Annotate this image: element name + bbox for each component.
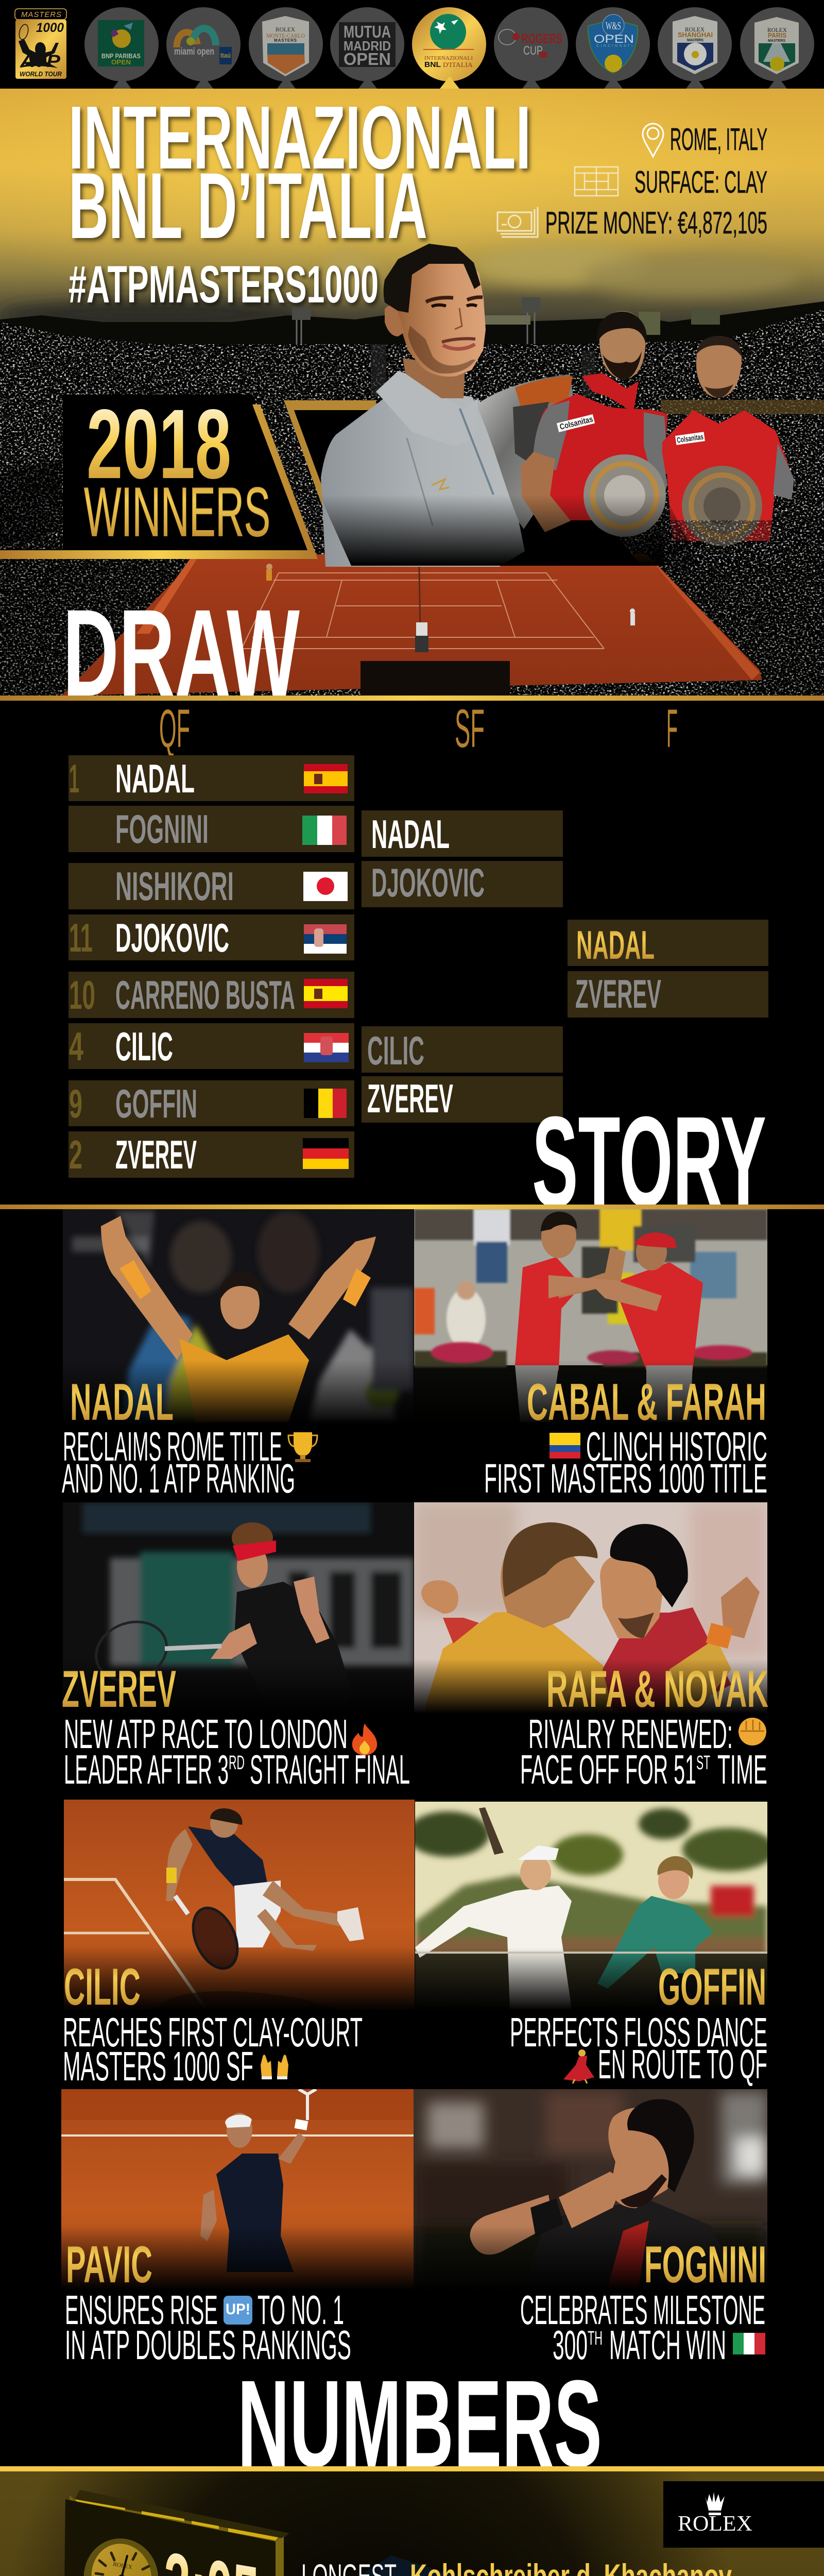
caption line two: TIME xyxy=(717,1747,767,1792)
title xyxy=(68,87,531,314)
trophy xyxy=(472,375,575,529)
icon: fist xyxy=(739,1718,766,1745)
round headers: SF xyxy=(455,699,485,759)
logo: Rolex Paris Masters xyxy=(740,7,814,89)
logo: Miami Open xyxy=(166,7,241,89)
neck xyxy=(403,358,465,398)
QF row: Zverev: 2 xyxy=(69,1132,82,1177)
logo: Mutua Madrid Open: OPEN xyxy=(344,49,391,69)
F row: Nadal xyxy=(568,920,768,968)
clock: longest match xyxy=(64,2490,289,2576)
logo: Rolex Shanghai Masters xyxy=(658,7,732,89)
facial features xyxy=(426,297,483,349)
divider bar under hero xyxy=(0,696,824,701)
hero: doubles trophies xyxy=(583,454,762,546)
panel: Cilic story: REACHES FIRST CLAY-COURT xyxy=(63,2009,363,2055)
logo: BNP Paribas Open xyxy=(84,7,159,89)
photo: Rafa and Novak at net xyxy=(414,1502,767,1716)
divider bar above story xyxy=(0,1205,824,1209)
caption line two: LEADER AFTER 3 xyxy=(64,1747,229,1792)
photo fade xyxy=(414,1360,767,1426)
logo: Rolex Monte-Carlo Masters: MASTERS xyxy=(274,38,297,43)
panel: Rafa and Novak story xyxy=(414,1502,768,1792)
logo: ATP Masters 1000: ATP xyxy=(20,52,60,71)
hero: treeline and buildings xyxy=(0,297,824,371)
semifinals column xyxy=(362,810,563,1123)
QF row: Goffin: GOFFIN xyxy=(115,1081,197,1126)
QF row: Cilic xyxy=(68,1023,354,1069)
jacket xyxy=(321,371,525,567)
icon: Colombia flag xyxy=(550,1433,580,1459)
player name: PAVIC xyxy=(66,2236,152,2294)
icon: banknotes xyxy=(497,207,538,237)
player name: ZVEREV xyxy=(62,1660,176,1718)
hair xyxy=(384,244,480,313)
caption line two: TH xyxy=(588,2328,603,2349)
photo: Nadal celebrating xyxy=(63,1209,414,1426)
logo: Rogers Cup: ROGERS xyxy=(521,31,562,46)
QF row: Nadal: NADAL xyxy=(115,756,195,801)
photo: Pavic serving xyxy=(61,2089,414,2290)
QF row: Djokovic: DJOKOVIC xyxy=(115,915,229,960)
logo: Rolex Monte-Carlo Masters: MONTE-CARLO xyxy=(266,32,305,39)
hero: Cabal: Colsanitas xyxy=(559,415,594,432)
year: 2018 xyxy=(87,388,231,499)
hero: black backdrop frame behind winners xyxy=(284,400,641,566)
F row: Zverev: ZVEREV xyxy=(575,971,661,1016)
photo fade xyxy=(61,2226,414,2290)
logo: Rolex Monte-Carlo Masters: ROLEX xyxy=(276,26,295,33)
winners word: WINNERS xyxy=(84,473,270,551)
hero: clay court xyxy=(62,554,762,696)
QF row: Nadal xyxy=(68,755,354,801)
caption: NEW ATP RACE TO LONDON xyxy=(64,1711,348,1757)
logo: Rolex Shanghai Masters: ROLEX xyxy=(685,26,705,33)
icon: location pin xyxy=(643,124,663,157)
icon: fire xyxy=(352,1723,377,1755)
logo: Rolex Paris Masters: MASTERS xyxy=(768,39,785,43)
SF row: Nadal: NADAL xyxy=(371,811,450,857)
logo: Miami Open: Itaú xyxy=(220,52,231,59)
logo: ATP Masters 1000: MASTERS xyxy=(21,10,61,19)
SF row: Djokovic: DJOKOVIC xyxy=(371,860,485,905)
caption line two: 300 xyxy=(553,2322,588,2368)
icon: court xyxy=(575,167,618,196)
hero: Nadal with trophy xyxy=(321,244,575,567)
icon: up badge xyxy=(224,2296,252,2325)
SF row: Zverev: ZVEREV xyxy=(367,1076,453,1121)
sponsor: Rolex: ROLEX xyxy=(678,2512,752,2536)
QF row: Zverev: ZVEREV xyxy=(115,1132,197,1177)
logo: Internazionali BNL d'Italia (active): BNL xyxy=(424,60,441,69)
icon: raised hands xyxy=(261,2055,288,2079)
logo: Internazionali BNL d'Italia (active): INTERNAZIONALI xyxy=(424,55,473,61)
logo: Rolex Monte-Carlo Masters xyxy=(249,7,323,89)
sponsor: Rolex xyxy=(663,2481,824,2548)
hero: 2018 winners panel xyxy=(0,388,318,559)
photo fade xyxy=(414,1659,767,1714)
QF row: Cilic: CILIC xyxy=(115,1024,173,1069)
QF row: Nadal: 1 xyxy=(69,756,79,801)
infographic canvas: STRAIGHT FINAL xyxy=(250,1747,410,1792)
logo: ATP Masters 1000: 1000 xyxy=(36,21,64,35)
SF row: Cilic xyxy=(362,1026,563,1073)
section heading: draw: DRAW xyxy=(63,584,300,722)
logo: Rolex Shanghai Masters: MASTERS xyxy=(687,39,703,42)
caption line two xyxy=(553,2322,726,2368)
player name: CILIC xyxy=(64,1958,141,2016)
logo: Internazionali BNL d'Italia (active) xyxy=(412,7,486,89)
logo: Rogers Cup: CUP xyxy=(523,44,543,58)
photo: Cilic serving xyxy=(64,1800,415,2011)
logo: Rogers Cup xyxy=(494,7,568,89)
caption line two: RD xyxy=(229,1752,245,1774)
player name: NADAL xyxy=(70,1374,174,1431)
hero: stadium crowd xyxy=(0,309,824,701)
logo: Rolex Shanghai Masters: SHANGHAI xyxy=(678,31,713,39)
photo fade xyxy=(414,2226,767,2290)
SF row: Nadal xyxy=(362,810,563,857)
panel: Pavic story: TO NO. 1 xyxy=(258,2287,344,2333)
SF row: Cilic: CILIC xyxy=(367,1028,424,1073)
F row: Nadal: NADAL xyxy=(576,922,655,968)
QF row: Goffin: 9 xyxy=(69,1081,82,1126)
icon: trophy xyxy=(288,1432,317,1462)
QF row: Fognini: FOGNINI xyxy=(115,806,209,852)
QF row: Carreno Busta: CARRENO BUSTA xyxy=(115,972,295,1018)
logo: Mutua Madrid Open: MADRID xyxy=(344,38,391,54)
numbers section background xyxy=(0,2471,824,2576)
QF row: Carreno Busta xyxy=(68,972,354,1018)
panel: Nadal story: AND NO. 1 ATP RANKING xyxy=(62,1455,295,1501)
final column xyxy=(568,920,768,1018)
hero: Farah: Colsanitas xyxy=(676,432,704,445)
logo: Rolex Paris Masters: ROLEX xyxy=(767,26,787,33)
panel: Nadal story: RECLAIMS ROME TITLE xyxy=(63,1423,282,1469)
logo: Rolex Paris Masters: PARIS xyxy=(768,31,786,39)
logo: Internazionali BNL d'Italia (active): D'ITALIA xyxy=(443,61,473,69)
icon: up badge: UP! xyxy=(226,2301,250,2318)
hero: Cabal xyxy=(521,311,668,532)
icon: Rolex crown xyxy=(705,2492,725,2515)
draw section background xyxy=(0,701,824,1205)
QF row: Djokovic: 11 xyxy=(69,915,93,960)
photo fade xyxy=(63,1659,414,1714)
photo: Goffin floss dance xyxy=(407,1802,775,2010)
panel: Pavic story: ENSURES RISE xyxy=(65,2287,218,2333)
logo: BNP Paribas Open: OPEN xyxy=(111,58,131,66)
header bar background xyxy=(0,0,824,89)
photo: Cabal and Farah hugging xyxy=(414,1209,767,1427)
logo: W&S Open Cincinnati: CINCINNATI xyxy=(596,44,632,48)
panel: Zverev story xyxy=(62,1502,414,1792)
quarterfinals column xyxy=(68,755,354,1178)
panel: Fognini story xyxy=(414,2089,767,2368)
logo: Miami Open: miami open xyxy=(174,46,214,57)
logo: Mutua Madrid Open: MUTUA xyxy=(344,22,391,41)
QF row: Fognini xyxy=(68,806,354,852)
logo: W&S Open Cincinnati: W&S xyxy=(606,20,621,32)
title: BNL D’ITALIA xyxy=(68,153,427,258)
head xyxy=(398,262,486,377)
QF row: Nishikori: NISHIKORI xyxy=(115,863,234,909)
caption line two: ST xyxy=(696,1752,710,1774)
photo fade xyxy=(64,1947,415,2011)
logo: ATP Masters 1000: WORLD TOUR xyxy=(20,70,62,78)
panel: Cabal and Farah story xyxy=(414,1209,767,1501)
logo: Mutua Madrid Open xyxy=(330,7,404,89)
panel: Goffin story xyxy=(407,1802,775,2087)
logo: W&S Open Cincinnati: OPEN xyxy=(594,32,634,45)
QF row: Zverev xyxy=(68,1131,354,1178)
panel: Cilic story xyxy=(63,1800,415,2089)
title: INTERNAZIONALI xyxy=(68,87,531,188)
panel: Nadal story xyxy=(62,1209,414,1501)
QF row: Carreno Busta: 10 xyxy=(69,972,95,1018)
photo fade xyxy=(415,1947,767,2010)
logo: ATP Masters 1000 xyxy=(15,9,66,79)
hero: Farah xyxy=(654,336,794,541)
round headers: QF xyxy=(159,699,190,759)
photo: Fognini blowing kiss xyxy=(414,2089,767,2290)
logo: BNP Paribas Open: BNP PARIBAS xyxy=(101,52,141,60)
QF row: Cilic: 4 xyxy=(69,1024,83,1069)
tournament facts xyxy=(497,122,767,240)
hero: bottom fade over winners xyxy=(319,495,700,566)
panel: Cilic story: MASTERS 1000 SF xyxy=(63,2043,253,2089)
icon: dancer xyxy=(563,2049,594,2083)
divider bar above numbers xyxy=(0,2466,824,2471)
hero: sky background xyxy=(0,89,824,346)
QF row: Goffin xyxy=(68,1080,354,1126)
hashtag: #ATPMASTERS1000 xyxy=(68,255,379,314)
infographic canvas: F xyxy=(666,699,678,759)
ear xyxy=(385,306,404,336)
photo fade xyxy=(63,1360,414,1426)
stat: longest match xyxy=(301,2557,732,2576)
logo: W&S Open Cincinnati xyxy=(576,7,650,89)
round headers xyxy=(159,699,678,759)
icon: Italy flag xyxy=(733,2333,765,2354)
photo: Zverev forehand xyxy=(63,1502,414,1690)
panel: Pavic story: IN ATP DOUBLES RANKINGS xyxy=(65,2322,351,2368)
panel: Pavic story xyxy=(61,2089,414,2368)
